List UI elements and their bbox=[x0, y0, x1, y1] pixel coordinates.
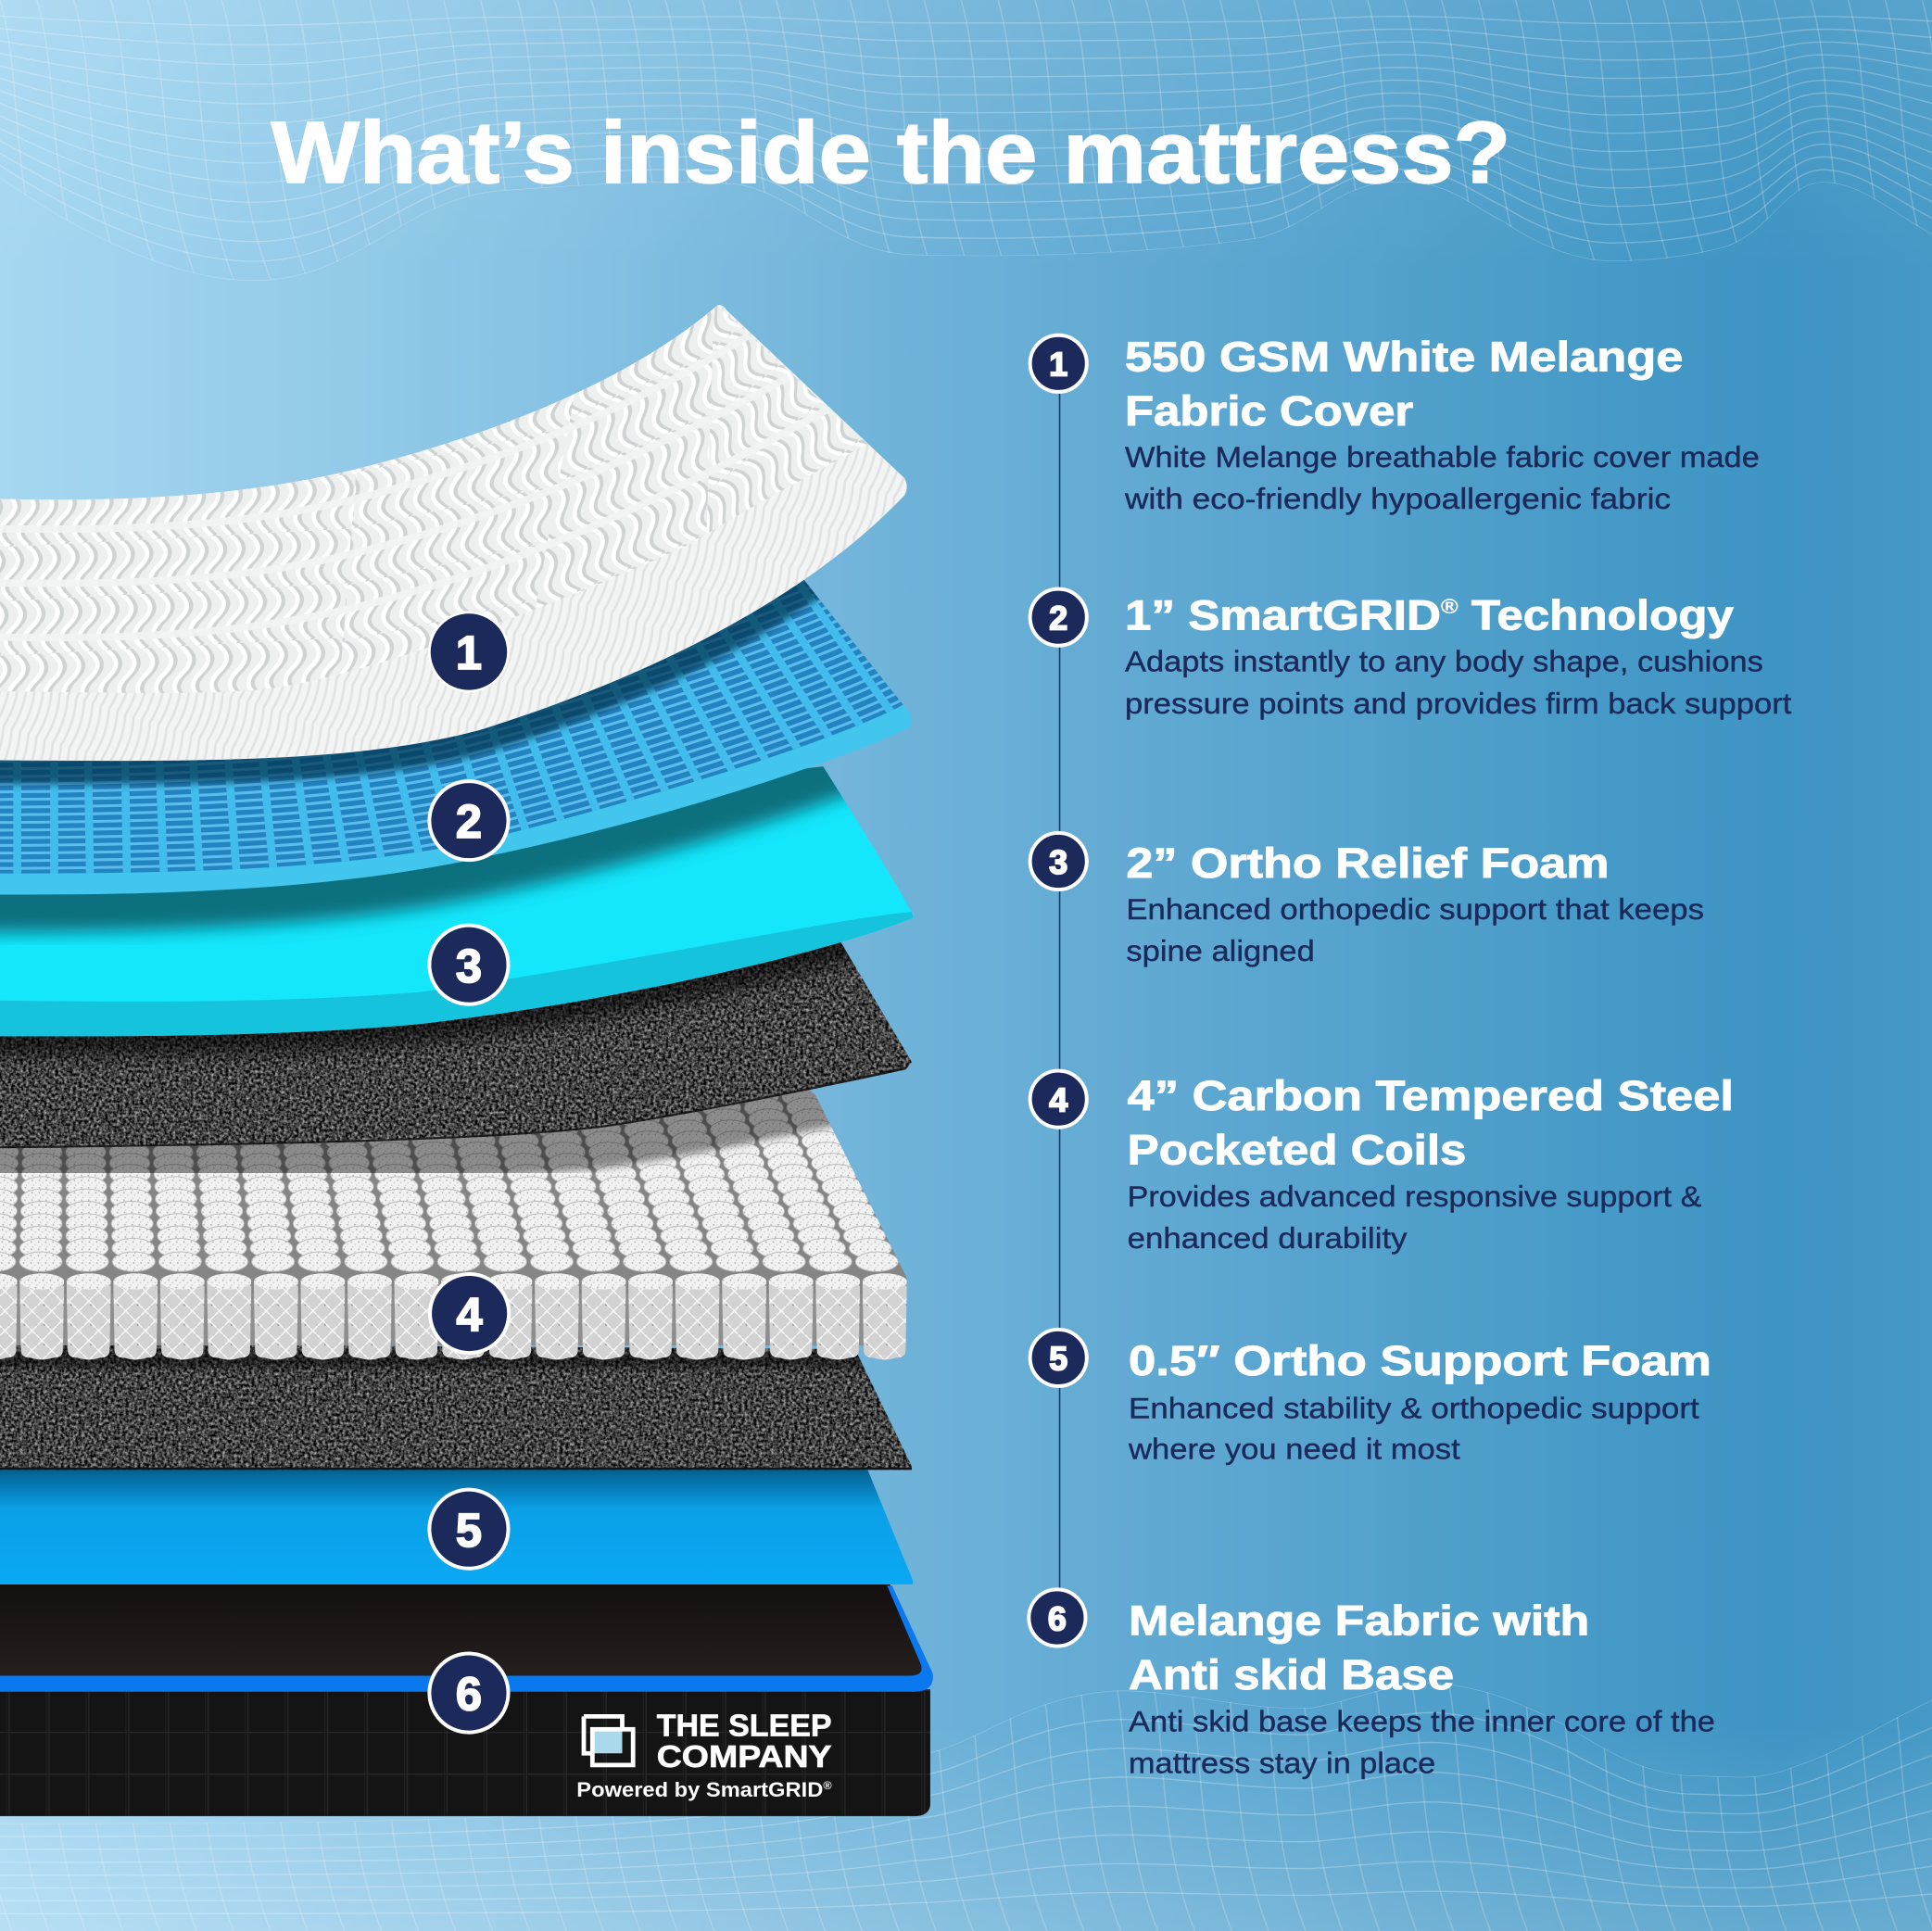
badge 6 on illustration: 6 bbox=[456, 1668, 482, 1721]
heading 5: 0.5″ Ortho Support Foam bbox=[1129, 1337, 1711, 1384]
heading 6: Melange Fabric with bbox=[1129, 1597, 1589, 1645]
feature 5: ortho support foam bbox=[1030, 1330, 1711, 1465]
description 6 bbox=[1129, 1704, 1715, 1780]
heading 6 bbox=[1129, 1597, 1589, 1698]
number marker 2: 2 bbox=[1049, 600, 1067, 637]
feature 3: ortho relief foam bbox=[1030, 833, 1704, 967]
badge 1 on illustration: 1 bbox=[456, 626, 482, 679]
background mesh: bottom wave bbox=[0, 1683, 1932, 1931]
badge 5 on illustration bbox=[429, 1490, 509, 1569]
number marker 5 bbox=[1030, 1330, 1087, 1386]
icon: overlapping squares bbox=[584, 1716, 633, 1765]
layer 4: pocketed coils bbox=[0, 1067, 912, 1359]
heading 2: ® bbox=[1441, 595, 1458, 618]
brand logo: The Sleep Company: ® bbox=[823, 1779, 832, 1792]
badge 6 on illustration bbox=[429, 1654, 509, 1733]
heading 2: Technology bbox=[1458, 592, 1734, 639]
number marker 6: 6 bbox=[1048, 1600, 1067, 1637]
description 3: Enhanced orthopedic support that keeps bbox=[1126, 892, 1704, 926]
description 3: spine aligned bbox=[1126, 934, 1315, 967]
badge 4 on illustration: 4 bbox=[457, 1288, 483, 1341]
number marker 5: 5 bbox=[1049, 1341, 1067, 1378]
badge 4 on illustration bbox=[430, 1274, 509, 1353]
description 1: White Melange breathable fabric cover made bbox=[1125, 440, 1760, 473]
upper felt sheet bbox=[0, 942, 912, 1149]
number marker 3 bbox=[1030, 833, 1087, 890]
description 5: Enhanced stability & orthopedic support bbox=[1129, 1392, 1699, 1425]
description 3 bbox=[1126, 892, 1704, 967]
description 4: Provides advanced responsive support & bbox=[1128, 1180, 1701, 1213]
layer 1: white melange fabric cover bbox=[0, 284, 937, 770]
description 6: Anti skid base keeps the inner core of the bbox=[1129, 1704, 1715, 1737]
description 5 bbox=[1128, 1392, 1699, 1465]
description 2 bbox=[1125, 645, 1792, 720]
description 2: pressure points and provides firm back support bbox=[1125, 687, 1792, 720]
badge 3 on illustration bbox=[429, 926, 509, 1004]
brand logo: The Sleep Company: COMPANY bbox=[657, 1740, 832, 1774]
badge 1 on illustration bbox=[429, 612, 509, 691]
brand logo: The Sleep Company bbox=[576, 1710, 832, 1801]
title: What’s inside the mattress? bbox=[271, 105, 1510, 202]
layer 2: SmartGRID bbox=[0, 580, 911, 895]
background mesh: top wave bbox=[0, 0, 1932, 296]
mattress layer stack illustration bbox=[0, 284, 986, 1816]
number marker 4 bbox=[1030, 1071, 1087, 1128]
description 4: enhanced durability bbox=[1128, 1221, 1408, 1255]
feature 1: fabric cover bbox=[1030, 333, 1760, 515]
heading 4: Pocketed Coils bbox=[1128, 1127, 1466, 1174]
layer 6: mattress base with anti skid fabric bbox=[0, 1584, 933, 1816]
timeline connector line bbox=[1059, 363, 1061, 1618]
brand logo: The Sleep Company: THE SLEEP bbox=[657, 1710, 832, 1744]
brand logo: The Sleep Company: Powered by SmartGRID bbox=[576, 1778, 812, 1801]
heading 4: 4” Carbon Tempered Steel bbox=[1128, 1072, 1734, 1119]
number marker 3: 3 bbox=[1049, 844, 1067, 881]
number marker 2 bbox=[1030, 589, 1087, 646]
layer 3: ortho relief foam bbox=[0, 766, 914, 1036]
number marker 6 bbox=[1029, 1589, 1085, 1647]
layer 5: ortho support foam bbox=[0, 1464, 918, 1587]
feature 6: anti skid base bbox=[1029, 1589, 1715, 1780]
feature 4: pocketed coils bbox=[1030, 1071, 1734, 1255]
number marker 4: 4 bbox=[1049, 1081, 1067, 1118]
number marker 1 bbox=[1030, 335, 1087, 392]
feature 2: SmartGRID bbox=[1030, 589, 1792, 720]
heading 6: Anti skid Base bbox=[1129, 1651, 1454, 1698]
description 2: Adapts instantly to any body shape, cushions bbox=[1125, 645, 1763, 678]
badge 5 on illustration: 5 bbox=[456, 1504, 482, 1557]
badge 2 on illustration: 2 bbox=[456, 795, 482, 848]
heading 1: 550 GSM White Melange bbox=[1125, 333, 1683, 380]
description 4 bbox=[1128, 1180, 1701, 1255]
heading 2: 1” SmartGRID bbox=[1125, 592, 1404, 639]
heading 1 bbox=[1125, 333, 1683, 435]
description 1: with eco-friendly hypoallergenic fabric bbox=[1124, 482, 1671, 515]
number marker 1: 1 bbox=[1049, 347, 1067, 384]
badge 2 on illustration bbox=[429, 781, 509, 860]
heading 3: 2” Ortho Relief Foam bbox=[1126, 839, 1610, 887]
description 1 bbox=[1124, 440, 1760, 515]
heading 1: Fabric Cover bbox=[1125, 387, 1413, 435]
heading 4 bbox=[1128, 1072, 1734, 1174]
description 6: mattress stay in place bbox=[1129, 1747, 1435, 1780]
lower felt sheet bbox=[0, 1345, 912, 1470]
badge 3 on illustration: 3 bbox=[456, 940, 482, 992]
description 5: where you need it most bbox=[1128, 1432, 1460, 1465]
